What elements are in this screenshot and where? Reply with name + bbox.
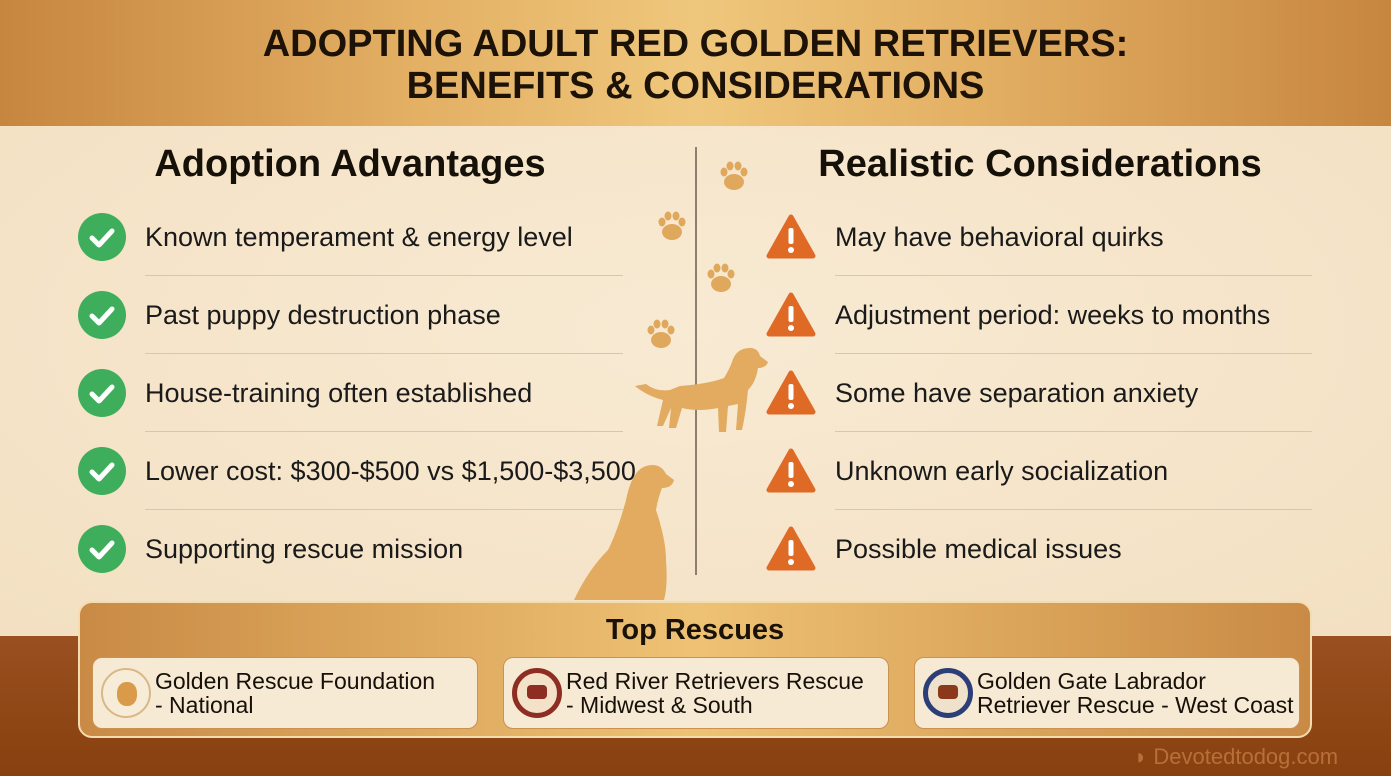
logo — [101, 668, 151, 718]
body background — [0, 126, 1391, 636]
panel: considerations list — [766, 214, 1312, 570]
header band: ADOPTING ADULT RED GOLDEN RETRIEVERS: — [263, 23, 1128, 65]
sitting dog — [574, 465, 674, 600]
footer band — [0, 636, 1391, 776]
panel: advantages list — [78, 213, 636, 573]
check icon 5 — [78, 525, 126, 573]
warning icon 5 — [766, 526, 816, 570]
check icon 2 — [78, 291, 126, 339]
item 4: Lower cost: $300-$500 vs $1,500-$3,500 — [145, 456, 636, 486]
heading: advantages: Adoption Advantages — [154, 143, 546, 185]
header band: BENEFITS & CONSIDERATIONS — [407, 65, 984, 107]
warning icon 3 — [766, 370, 816, 414]
warning icon 2 — [766, 292, 816, 336]
heading: considerations: Realistic Considerations — [818, 143, 1262, 185]
item 4: Unknown early socialization — [835, 456, 1168, 486]
standing dog — [635, 348, 768, 432]
card: Red River Retrievers Rescue — [503, 657, 889, 729]
decorative paws and dog silhouettes — [574, 162, 768, 600]
logo — [923, 668, 973, 718]
check icon 3 — [78, 369, 126, 417]
item 2: Past puppy destruction phase — [145, 300, 501, 330]
card: Golden Rescue Foundation: Golden Rescue Foundation — [155, 668, 435, 694]
panel: top rescues — [78, 601, 1312, 738]
center divider line — [695, 147, 697, 575]
logo — [512, 668, 562, 718]
card: Golden Gate Labrador Retriever Rescue: Golden Gate Labrador — [977, 668, 1206, 694]
card: Golden Gate Labrador Retriever Rescue: Retriever Rescue - West Coast — [977, 692, 1294, 718]
item 1: May have behavioral quirks — [835, 222, 1164, 252]
warning icon 4 — [766, 448, 816, 492]
warning icon 1 — [766, 214, 816, 258]
card: Golden Rescue Foundation: - National — [155, 692, 253, 718]
item 5: Possible medical issues — [835, 534, 1122, 564]
check icon 4 — [78, 447, 126, 495]
item 2: Adjustment period: weeks to months — [835, 300, 1270, 330]
item 1: Known temperament & energy level — [145, 222, 573, 252]
watermark: ◗ Devotedtodog.com — [1134, 744, 1338, 769]
item 3: House-training often established — [145, 378, 532, 408]
card: Golden Rescue Foundation — [92, 657, 478, 729]
check icon 1 — [78, 213, 126, 261]
card: Red River Retrievers Rescue: Red River Retrievers Rescue — [566, 668, 864, 694]
card: Golden Gate Labrador Retriever Rescue — [914, 657, 1300, 729]
card: Red River Retrievers Rescue: - Midwest & South — [566, 692, 753, 718]
item 5: Supporting rescue mission — [145, 534, 463, 564]
rescues heading: Top Rescues — [606, 614, 784, 646]
header band — [0, 0, 1391, 126]
item 3: Some have separation anxiety — [835, 378, 1198, 408]
